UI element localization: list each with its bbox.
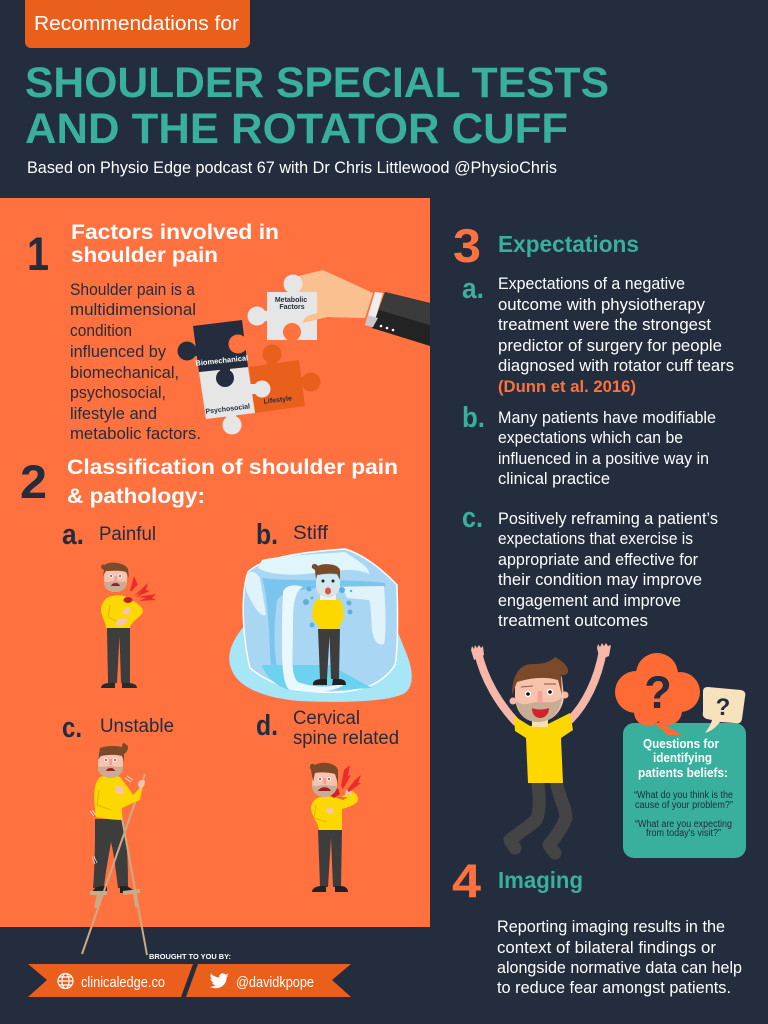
callout: questions box: Questions for [643, 736, 719, 751]
callout: questions box [623, 723, 746, 858]
callout: questions box: identifying [653, 750, 712, 765]
icon: puzzle and hand: Metabolic [275, 297, 307, 304]
label d cervical spine related: Cervical [293, 708, 360, 729]
footer ribbon: website [28, 964, 193, 997]
section 1 text: influenced by [70, 343, 167, 361]
point 3c: c. [462, 502, 483, 534]
section 1 heading [71, 220, 279, 267]
icon: puzzle and hand: Psychosocial [205, 403, 251, 416]
section 1 text: metabolic factors. [70, 425, 201, 443]
label d cervical spine related: d. [256, 710, 278, 742]
figure: man frozen in ice cube [229, 549, 412, 702]
label d cervical spine related [256, 708, 399, 749]
section 1 text: condition [70, 322, 132, 340]
section 1 number: 1 [27, 227, 49, 280]
figure: cervical spine man [310, 763, 361, 892]
section 3 number: 3 [453, 219, 481, 272]
section 4 text: context of bilateral findings or [497, 939, 717, 957]
point 3a: outcome with physiotherapy [498, 296, 706, 314]
point 3b: Many patients have modifiable [498, 409, 716, 427]
brought to you by label: BROUGHT TO YOU BY: [149, 952, 231, 961]
section 4 text: alongside normative data can help [497, 959, 742, 977]
label a painful [62, 519, 156, 551]
section 1 text [70, 281, 201, 443]
footer ribbon: website: clinicaledge.co [81, 975, 165, 991]
section 2 heading: & pathology: [67, 484, 205, 508]
title: SHOULDER SPECIAL TESTS [25, 59, 609, 107]
title: AND THE ROTATOR CUFF [25, 105, 568, 153]
icon: orange question bubble: ? [644, 667, 672, 718]
label c unstable: Unstable [100, 716, 174, 737]
icon: orange question bubble [615, 653, 700, 735]
section 1 text: multidimensional [70, 301, 196, 319]
figure: unstable man on stilts [82, 743, 147, 955]
label c unstable [62, 712, 174, 744]
footer ribbon: twitter [186, 964, 351, 997]
section 4 heading: Imaging [498, 867, 583, 893]
section 1 text: lifestyle and [70, 405, 157, 423]
callout: questions box: “What are you expecting [635, 819, 732, 830]
section 4 number: 4 [452, 854, 481, 907]
section 2 heading [67, 455, 398, 508]
section 3 heading: Expectations [498, 231, 639, 257]
point 3c: their condition may improve [498, 571, 702, 589]
point 3a: treatment were the strongest [498, 316, 711, 334]
point 3a: diagnosed with rotator cuff tears [498, 357, 734, 375]
section 1 text: biomechanical, [70, 364, 179, 382]
point 3b: influenced in a positive way in [498, 450, 709, 468]
callout: questions box: “What do you think is the [634, 790, 733, 801]
section 1 heading: Factors involved in [71, 220, 279, 244]
point 3b: expectations which can be [498, 429, 683, 447]
panel: orange left panel [0, 198, 430, 927]
section 2 number: 2 [20, 455, 47, 508]
callout: questions box: patients beliefs: [638, 765, 728, 780]
icon: cream question bubble [703, 687, 745, 733]
label d cervical spine related: spine related [293, 728, 399, 749]
point 3c: appropriate and effective for [498, 551, 698, 569]
banner: recommendations [25, 0, 250, 48]
point 3a: (Dunn et al. 2016) [498, 378, 636, 396]
figure: jumping happy man [471, 643, 611, 853]
section 4 text: to reduce fear amongst patients. [497, 979, 731, 997]
section 1 heading: shoulder pain [71, 243, 218, 267]
icon: cream question bubble: ? [716, 694, 730, 721]
section 4 text [497, 918, 742, 997]
point 3a: Expectations of a negative [498, 275, 685, 293]
banner: recommendations: Recommendations for [34, 13, 239, 35]
label b stiff: b. [256, 519, 278, 551]
label b stiff: Stiff [293, 523, 329, 544]
point 3a [462, 273, 734, 396]
subtitle: Based on Physio Edge podcast 67 with Dr Chris Littlewood @PhysioChris [27, 159, 557, 177]
label a painful: a. [62, 519, 84, 551]
section 1 text: psychosocial, [70, 384, 166, 402]
callout: questions box: cause of your problem?” [635, 800, 733, 811]
point 3c: engagement and improve [498, 592, 681, 610]
point 3b: b. [462, 402, 485, 434]
section 4 text: Reporting imaging results in the [497, 918, 725, 936]
figure: painful man [101, 563, 156, 688]
icon: puzzle and hand: Lifestyle [263, 395, 292, 406]
point 3b: clinical practice [498, 470, 610, 488]
footer ribbon: twitter: @davidkpope [236, 975, 314, 991]
point 3c [462, 502, 718, 630]
icon: puzzle and hand: Biomechanical [195, 353, 249, 368]
point 3a: predictor of surgery for people [498, 337, 722, 355]
icon: puzzle and hand: Factors [279, 304, 305, 311]
label a painful: Painful [99, 524, 156, 545]
point 3c: Positively reframing a patient’s [498, 510, 718, 528]
point 3a: a. [462, 273, 484, 305]
label c unstable: c. [62, 712, 82, 744]
point 3c: expectations that exercise is [498, 530, 693, 548]
point 3b [462, 402, 716, 488]
title [25, 59, 609, 153]
section 2 heading: Classification of shoulder pain [67, 455, 398, 479]
section 1 text: Shoulder pain is a [70, 281, 196, 299]
callout: questions box: from today's visit?” [646, 828, 721, 839]
label b stiff [256, 519, 329, 551]
point 3c: treatment outcomes [498, 612, 648, 630]
icon: puzzle and hand [178, 270, 430, 434]
